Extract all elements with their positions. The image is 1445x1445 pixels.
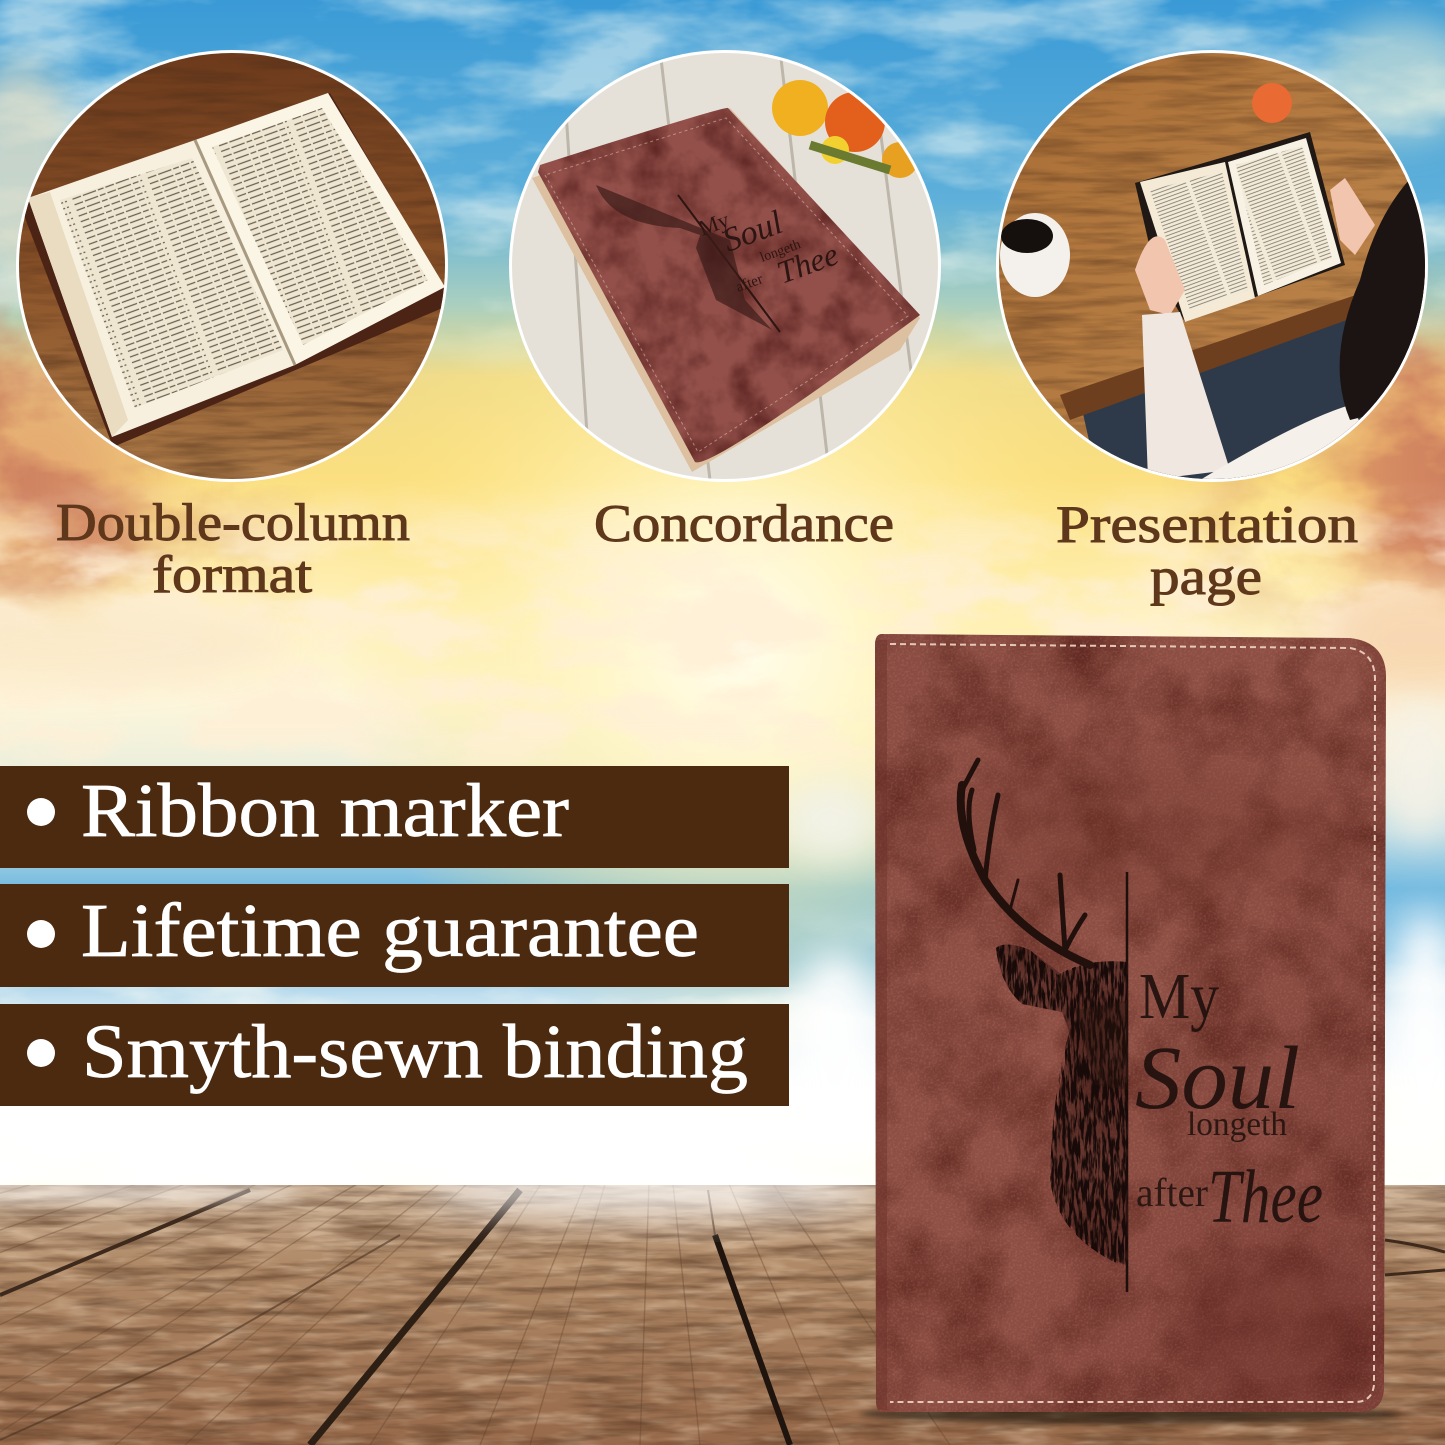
hands and sleeve [1135, 178, 1375, 315]
flower [1252, 83, 1292, 123]
cover text: Soul [1135, 1029, 1300, 1128]
label: format: format [152, 546, 312, 604]
cover text [1135, 960, 1323, 1239]
angled book: longeth [758, 237, 803, 266]
cover text: after [1136, 1170, 1208, 1215]
open book in hands [1135, 132, 1345, 322]
angled book: Soul [718, 204, 788, 260]
background sky [0, 0, 1445, 1060]
feature bar: ribbon marker: Ribbon marker [81, 769, 569, 853]
label: double-column format: Double-column [56, 494, 410, 552]
angled book: Thee [772, 235, 843, 291]
angled book [530, 100, 930, 475]
angled book: My [695, 207, 732, 241]
photo circle: concordance [509, 50, 945, 485]
open bible [20, 93, 445, 447]
coffee cup [1000, 213, 1070, 297]
label: page: page [1150, 548, 1262, 606]
cover text: Thee [1208, 1155, 1323, 1239]
feature bar: ribbon marker [0, 766, 789, 868]
label: presentation: Presentation [1056, 496, 1358, 554]
book cover [860, 630, 1400, 1424]
feature bar: lifetime guarantee: Lifetime guarantee [81, 889, 699, 973]
cover text: My [1139, 960, 1219, 1033]
wooden table [0, 1185, 1445, 1445]
label: concordance: Concordance [594, 495, 894, 553]
feature bar: smyth-sewn binding [0, 1004, 789, 1106]
flowers [772, 80, 918, 178]
cover text: longeth [1187, 1106, 1287, 1143]
photo circle: double-column format [15, 50, 450, 485]
feature bar: smyth-sewn binding: Smyth-sewn binding [82, 1010, 748, 1094]
angled book: after [734, 271, 765, 296]
feature bar: lifetime guarantee [0, 884, 789, 987]
photo circle: presentation page [995, 50, 1430, 490]
deer antlers [961, 760, 1090, 965]
deer engraving [961, 760, 1128, 1292]
